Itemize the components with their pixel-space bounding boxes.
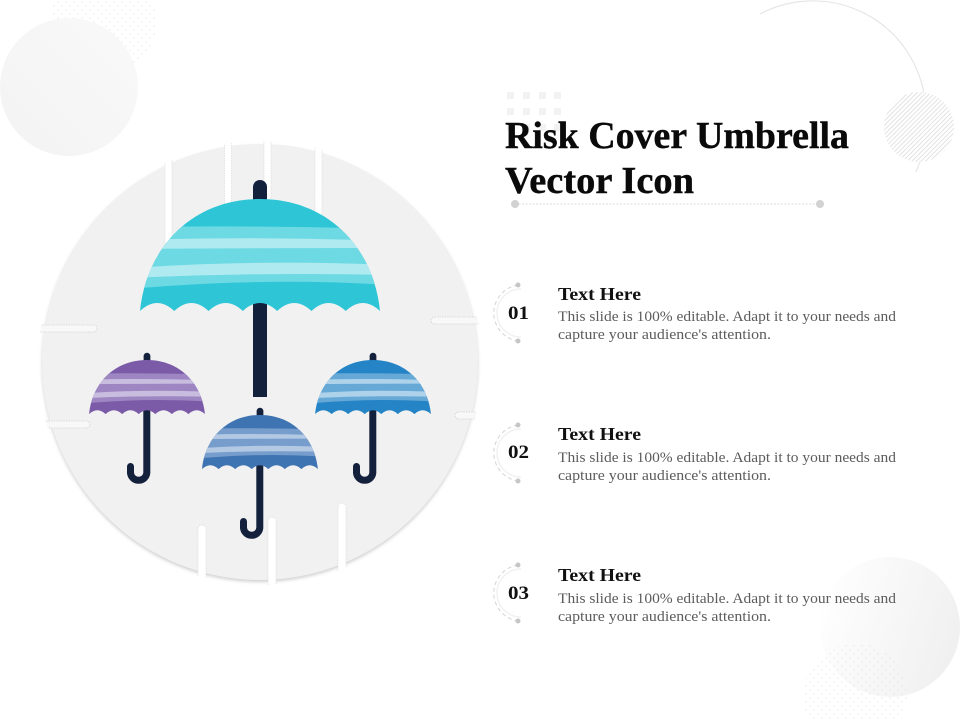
- decor: top-left dotted circle: [50, 0, 156, 75]
- decor: bottom-right gradient circle: [820, 557, 960, 697]
- title: Risk Cover Umbrella: [505, 115, 849, 157]
- heading 03: Text Here: [558, 565, 641, 585]
- body 03: [558, 591, 897, 625]
- list item 03: [494, 562, 897, 625]
- decor: top-right thin arc: [760, 1, 926, 172]
- title divider: [511, 200, 824, 208]
- number badge 01: 01: [508, 303, 529, 324]
- heading 01: Text Here: [558, 284, 641, 304]
- body 01: [558, 309, 897, 343]
- heading 02: Text Here: [558, 424, 641, 444]
- decor: dot grid behind title: [507, 92, 561, 131]
- number badge 02: 02: [508, 442, 529, 463]
- body 02: capture your audience's attention.: [558, 468, 771, 484]
- body 01: capture your audience's attention.: [558, 327, 771, 343]
- icon: large teal umbrella: [130, 180, 390, 397]
- body 02: This slide is 100% editable. Adapt it to your needs and: [558, 450, 897, 466]
- title: Vector Icon: [505, 160, 694, 202]
- body 03: capture your audience's attention.: [558, 609, 771, 625]
- number badge 01: [494, 282, 529, 344]
- icon: purple umbrella: [84, 353, 210, 480]
- title: [505, 115, 849, 202]
- body 02: [558, 450, 897, 484]
- decor: top-right hatched circle: [884, 92, 954, 162]
- decor: top-left grey circle: [0, 18, 138, 156]
- list item 02: [494, 422, 897, 484]
- decor: bottom-right dotted circle: [803, 643, 907, 720]
- icon: indigo umbrella: [197, 408, 323, 535]
- body 03: This slide is 100% editable. Adapt it to your needs and: [558, 591, 897, 607]
- list item 01: [494, 282, 897, 344]
- number badge 03: [494, 562, 529, 624]
- body 01: This slide is 100% editable. Adapt it to your needs and: [558, 309, 897, 325]
- panel: segmented grey circle: [30, 130, 491, 599]
- icon: blue umbrella: [310, 353, 436, 480]
- number badge 03: 03: [508, 583, 529, 604]
- number badge 02: [494, 422, 529, 484]
